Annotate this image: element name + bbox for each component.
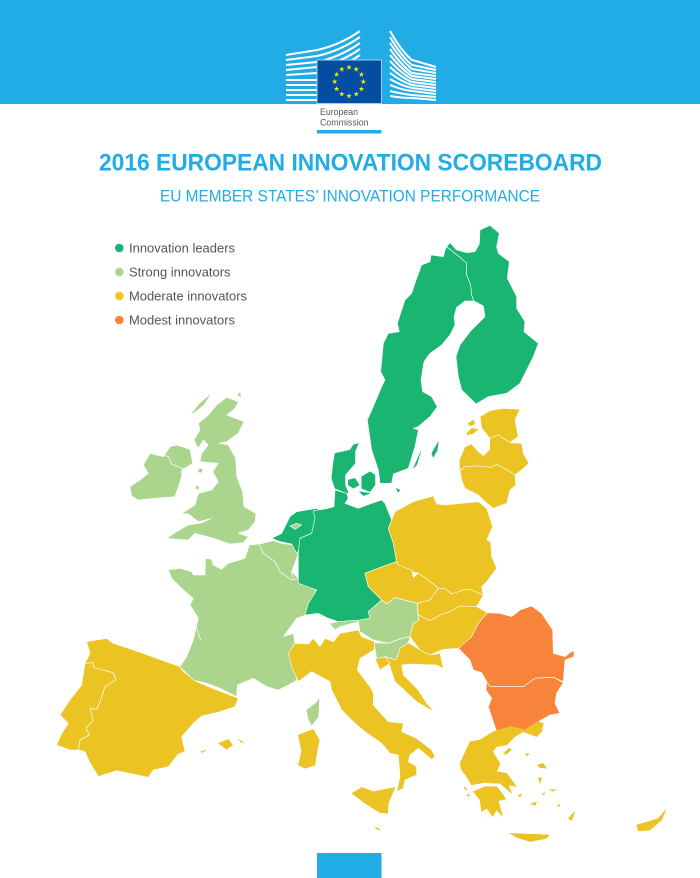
map: United Kingdom and Ireland (130, 393, 256, 544)
map: Hungary (410, 606, 487, 655)
map: Denmark (332, 443, 400, 496)
icon: building left wing (286, 31, 360, 100)
legend: innovation leaders: Innovation leaders (129, 242, 235, 256)
map: Sardinia (298, 729, 319, 768)
legend: strong innovators: Strong innovators (129, 266, 230, 280)
map: Croatia (385, 643, 443, 713)
European Commission logo (286, 31, 436, 134)
map: Corsica (307, 698, 319, 725)
map: Finland (447, 225, 538, 404)
legend: modest innovators: Modest innovators (129, 314, 235, 328)
map: Lithuania (460, 464, 516, 508)
map: Bulgaria (486, 677, 563, 732)
map: Slovakia (417, 588, 483, 621)
footer tab (317, 853, 382, 878)
map: Cyprus (637, 809, 666, 831)
map: Sicily and Malta (352, 787, 395, 830)
map: Baltic states (459, 408, 529, 508)
map: Slovenia (374, 637, 410, 660)
map of EU member states (57, 225, 666, 842)
map: Latvia (459, 435, 529, 475)
map: Spain and Portugal (57, 638, 244, 777)
subtitle: EU MEMBER STATES’ INNOVATION PERFORMANCE (160, 188, 540, 206)
map: Romania (458, 606, 574, 687)
map: Austria and Slovenia (329, 598, 418, 660)
map: Greece (460, 722, 575, 842)
logo wordmark: European (320, 107, 358, 117)
map: Germany (298, 490, 397, 622)
legend (115, 242, 247, 328)
title: 2016 EUROPEAN INNOVATION SCOREBOARD (99, 150, 602, 177)
map: Austria (329, 598, 418, 643)
map: Poland (388, 496, 497, 595)
map: France, Belgium and Luxembourg (168, 541, 316, 697)
map: Netherlands (272, 508, 320, 553)
map: Poland, Czech Republic, Slovakia, Hungary and Croatia (365, 496, 497, 713)
icon: building right wing (390, 31, 436, 100)
legend: moderate innovators: Moderate innovators (129, 290, 247, 304)
icon: EU flag (317, 60, 382, 104)
map: Italy (288, 630, 435, 792)
map: Estonia (480, 408, 520, 443)
header band (0, 0, 700, 104)
map: Czech Republic (365, 562, 438, 604)
map: Sweden (367, 247, 474, 483)
European Commission logo: Commission (320, 118, 368, 128)
